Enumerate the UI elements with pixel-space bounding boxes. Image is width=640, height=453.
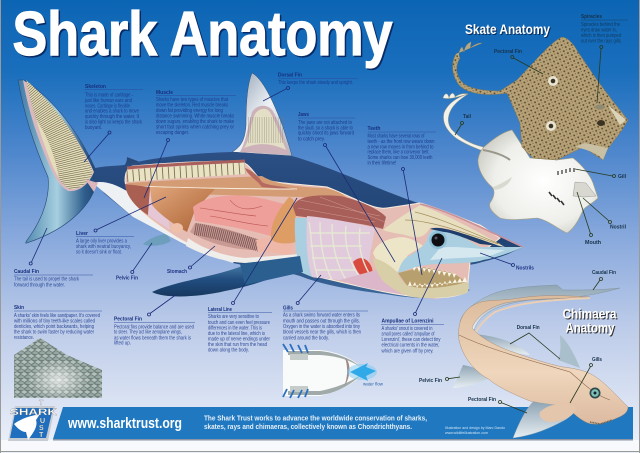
- logo: Shark Trust: U: [40, 418, 45, 425]
- label: skate tail: [455, 114, 472, 135]
- gills water-flow diagram: [283, 344, 377, 398]
- label: skate gill: Gill: [618, 174, 627, 180]
- red neck muscle: [293, 195, 386, 229]
- callout: spiracles: eyes draw water in,: [581, 28, 617, 34]
- callout: lateral line: due to the lateral line, which is: [208, 331, 265, 337]
- chimaera anatomy heading: [562, 306, 618, 336]
- callout: jaws: The jaws are not attached to: [298, 120, 352, 126]
- skate anatomy heading: Skate Anatomy: [466, 23, 551, 38]
- callout: spiracles: which is then pumped: [581, 33, 621, 39]
- dorsal fin cartilage: [240, 106, 290, 155]
- skate upper surface: [453, 37, 628, 160]
- banner statement: The Shark Trust works to advance the worldwide conservation of sharks,: [204, 414, 427, 422]
- cheek bone: [373, 237, 423, 272]
- chimaera anatomy heading: Chimaera: [562, 306, 617, 322]
- callout: skin: [14, 305, 102, 341]
- callout: teeth: Some sharks can lose 30,000 teeth: [368, 155, 433, 161]
- skate gills: [558, 168, 574, 175]
- title: Shark Anatomy: [12, 0, 393, 69]
- skate anatomy heading: Skate Anatomy: [465, 22, 550, 37]
- chimaera eye: [590, 388, 600, 398]
- skate mouth: [573, 182, 596, 197]
- callout: jaws: the skull, so a shark is able to: [298, 125, 353, 131]
- water flow label: water flow: [363, 382, 384, 386]
- label: stomach: Stomach: [167, 269, 187, 275]
- chimaera body: [459, 296, 628, 424]
- callout: liver: [76, 197, 166, 256]
- bottom white strip: [1, 440, 639, 451]
- chimaera pelvic fin: [453, 365, 490, 388]
- banner: [53, 407, 633, 440]
- chimaera second dorsal fin: [558, 335, 580, 368]
- callout: skeleton: noses. Cartilage is flexible: [85, 103, 130, 109]
- callout: pectoral fin: to steer. They act like aeroplane wings,: [114, 330, 182, 336]
- callout: ampullae of Lorenzini: small pores called 'ampullae of: [382, 332, 435, 338]
- eye: [429, 231, 447, 249]
- pectoral fin: [152, 258, 300, 296]
- label: chimaera caudal fin: [592, 270, 616, 290]
- banner statement: [204, 414, 427, 431]
- callout: gills: Gills: [283, 305, 293, 311]
- callout: muscle: down sugars, enabling the shark to make: [156, 119, 234, 125]
- body: [93, 152, 523, 298]
- callout: lateral line: down along the body.: [208, 347, 249, 353]
- label: skate mouth: [577, 192, 601, 246]
- callout: spiracles: Spiracles: [581, 14, 602, 20]
- callout: lateral line: differences in the water. This is: [208, 325, 262, 331]
- label: chimaera gills: [570, 357, 602, 403]
- label: skate nostril: Nostril: [610, 224, 627, 230]
- callout: skeleton: This is made of cartilage -: [85, 92, 133, 98]
- logo: Shark Trust: S: [39, 425, 44, 432]
- second dorsal fin: [124, 157, 142, 166]
- gill cage: [307, 216, 376, 286]
- callout: liver: A large oily liver provides a: [76, 239, 127, 245]
- callout: muscle: escaping danger.: [156, 130, 189, 136]
- chimaera tail fin: [460, 285, 620, 330]
- illustration credit: www.wildlifeillustration.com: [445, 431, 488, 435]
- callout: skin: Skin: [14, 305, 24, 311]
- callout: muscle: Sharks have two types of muscles that: [156, 97, 229, 103]
- vertebral column: [127, 168, 245, 176]
- blue gill arrows: [283, 344, 308, 398]
- callout: jaws: quickly shoot its jaws forward: [298, 131, 354, 137]
- skate underside tail: [443, 93, 486, 152]
- callout: gills: As a shark swims forward water enters its: [283, 313, 360, 319]
- callout: liver: shark with neutral buoyancy,: [76, 244, 131, 250]
- callout: ampullae of Lorenzini: A sharks' snout is covered in: [382, 326, 433, 332]
- chimaera anatomy heading: Anatomy: [566, 320, 615, 336]
- callout: lateral line: Sharks are very sensitive to: [208, 314, 259, 320]
- intestine: [193, 195, 292, 240]
- callout: lateral line: the skin that run from the head: [208, 342, 267, 348]
- callout: muscle: Muscle: [156, 90, 174, 96]
- label: chimaera gills: Gills: [592, 357, 602, 363]
- callout: skin: with millions of tiny teeth-like scales called: [14, 319, 95, 325]
- callout: skin: A sharks' skin feels like sandpaper. It's covered: [14, 313, 100, 319]
- callout: ampullae of Lorenzini: Lorenzini', these can detect tiny: [382, 337, 441, 343]
- illustration credit: Illustration and design by Marc Dando: [445, 426, 505, 430]
- callout: teeth: replace them, like a conveyor belt.: [368, 150, 430, 156]
- callout: teeth: in their lifetime!: [368, 161, 396, 167]
- callout: gills: blood vessels near the gills, which is then: [283, 330, 361, 336]
- skin texture swatch: [14, 338, 102, 398]
- caudal fin: [18, 80, 96, 243]
- dorsal fin: [232, 73, 292, 156]
- logo: Shark Trust: [8, 400, 58, 441]
- label: skate tail: Tail: [463, 114, 472, 120]
- callout: spiracles: out over the rays gills.: [581, 38, 622, 44]
- callout: muscle: distance swimming. White muscle breaks: [156, 113, 234, 119]
- lower teeth: [408, 277, 467, 288]
- callout: caudal fin: Caudal Fin: [14, 269, 39, 275]
- label: skate pectoral fin: [494, 49, 543, 74]
- callout: teeth: [368, 126, 436, 275]
- callout: pectoral fin: lifted up.: [114, 341, 131, 347]
- callout: teeth: Teeth: [368, 126, 381, 132]
- illustration credit: [445, 426, 505, 435]
- callout: lateral line: touch and can even feel pressure: [208, 320, 270, 326]
- snout: [398, 228, 523, 273]
- logo: Shark Trust: T: [39, 400, 44, 407]
- white belly: [93, 182, 240, 263]
- callout: caudal fin: [14, 228, 93, 288]
- callout: spiracles: Spiracles behind the: [581, 22, 620, 28]
- callout: caudal fin: forward through the water.: [14, 282, 65, 288]
- callout: skin: the shark to swim faster by reducing water: [14, 330, 94, 336]
- mouth interior: [398, 267, 467, 290]
- callout: gills: [283, 275, 368, 341]
- pink chin: [340, 270, 440, 300]
- logo: Shark Trust: T: [39, 432, 44, 439]
- callout: pectoral fin: as water flows beneath them the shark is: [114, 335, 191, 341]
- callout: pectoral fin: Pectoral Fin: [114, 317, 142, 323]
- callout: lateral line: Lateral Line: [208, 307, 233, 313]
- upper teeth: [412, 266, 456, 278]
- label: chimaera dorsal fin: [510, 325, 560, 359]
- callout: lateral line: [208, 198, 297, 353]
- callout: skeleton: quickly through the water. It: [85, 114, 140, 120]
- callout: skeleton: buoyant.: [85, 125, 102, 131]
- skate underside: [443, 93, 598, 233]
- callout: pectoral fin: Pectoral fins provide balance and are used: [114, 324, 194, 330]
- blue gill cover: [295, 218, 312, 277]
- callout: ampullae of Lorenzini: [381, 258, 444, 354]
- label: stomach: [167, 246, 215, 275]
- belly lining: [186, 238, 300, 263]
- callout: muscle: [144, 90, 236, 198]
- chimaera anatomy heading: Chimaera: [564, 306, 618, 322]
- callout: muscle: move the skeleton. Red muscle breaks: [156, 102, 228, 108]
- callout: dorsal fin: [263, 73, 358, 101]
- caudal fin cartilage: [23, 80, 94, 191]
- callout: skeleton: is also light so keeps the shark: [85, 119, 142, 125]
- callout: skeleton: and enables a shark to move: [85, 109, 139, 115]
- chimaera: [453, 285, 628, 438]
- shark illustration: [18, 73, 523, 300]
- label: skate mouth: Mouth: [585, 240, 601, 246]
- pelvic fin: [143, 234, 171, 246]
- label: chimaera pelvic fin: Pelvic Fin: [419, 378, 442, 384]
- callout: teeth: teeth - as the front row wears down: [368, 139, 435, 145]
- tan pectoral girdle muscle: [271, 197, 296, 243]
- label: chimaera pectoral fin: Pectoral Fin: [468, 397, 496, 403]
- water flow arrow: [350, 363, 376, 381]
- label: chimaera pectoral fin: [468, 397, 527, 413]
- label: nostrils: Nostrils: [516, 266, 534, 272]
- callout: liver: so it doesn't sink or float.: [76, 250, 122, 256]
- banner statement: skates, rays and chimaeras, collectively known as Chondrichthyans.: [204, 422, 412, 431]
- label: chimaera caudal fin: Caudal Fin: [592, 270, 616, 276]
- callout: muscle: down fat providing energy for long: [156, 108, 223, 114]
- title: Shark Anatomy: [14, 2, 394, 70]
- chimaera anatomy heading: Anatomy: [566, 320, 616, 336]
- callout: pectoral fin: [114, 294, 195, 347]
- callout: jaws: Jaws: [298, 112, 309, 118]
- callout: dorsal fin: Dorsal Fin: [278, 73, 302, 79]
- callout: ampullae of Lorenzini: electrical currents in the water,: [382, 343, 440, 349]
- orange muscle: [150, 187, 215, 232]
- callout: skin: denticles, which point backwards, helping: [14, 324, 94, 330]
- website url: www.sharktrust.org: [67, 415, 182, 432]
- label: skate pectoral fin: Pectoral Fin: [494, 49, 522, 55]
- tail muscle: [125, 184, 150, 215]
- callout: gills: carried around the body.: [283, 335, 329, 341]
- callout: gills: Oxygen in the water is absorbed into tiny: [283, 324, 360, 330]
- callout: liver: Liver: [76, 231, 89, 237]
- upper muscle band: [126, 176, 355, 203]
- lower jaw: [373, 258, 469, 298]
- callout: teeth: a new row moves in from behind to: [368, 144, 434, 150]
- callout: skeleton: Skeleton: [85, 84, 106, 90]
- label: nostrils: [480, 253, 534, 272]
- liver knob: [171, 223, 183, 233]
- callout: muscle: short fast sprints when catching prey or: [156, 124, 234, 130]
- callout: skeleton: just like human ears and: [84, 98, 132, 104]
- callout: jaws: to catch prey.: [298, 137, 325, 143]
- chimaera first dorsal fin: [472, 334, 530, 355]
- cutaway interior: [125, 161, 500, 298]
- label: pelvic fin: Pelvic Fin: [116, 276, 138, 282]
- callout: ampullae of Lorenzini: Ampullae of Lorenzini: [382, 319, 434, 325]
- callout: skeleton: [84, 84, 143, 162]
- callout: skin: resistance.: [14, 335, 34, 341]
- logo: Shark Trust: SHARK: [10, 407, 58, 417]
- callout: spiracles: [581, 14, 628, 103]
- callout: teeth: Most sharks have several rows of: [368, 134, 425, 140]
- chimaera pectoral fin: [513, 402, 572, 438]
- label: pelvic fin: [116, 243, 152, 282]
- callout: gills: mouth and passes out through the gills.: [283, 318, 360, 324]
- callout: lateral line: made up of nerve endings under: [208, 336, 270, 342]
- callout: jaws: [298, 112, 395, 262]
- skull: [383, 205, 505, 247]
- callout: caudal fin: The tail is used to propel the shark: [14, 277, 79, 283]
- label: skate gill: [575, 169, 627, 180]
- label: skate nostril: [583, 198, 627, 230]
- callout: dorsal fin: This keeps the shark steady and upright.: [278, 80, 353, 86]
- label: chimaera dorsal fin: Dorsal Fin: [517, 325, 540, 331]
- label: chimaera pelvic fin: [419, 377, 460, 384]
- stomach: [190, 223, 262, 250]
- callout: ampullae of Lorenzini: which are given off by prey.: [382, 348, 434, 354]
